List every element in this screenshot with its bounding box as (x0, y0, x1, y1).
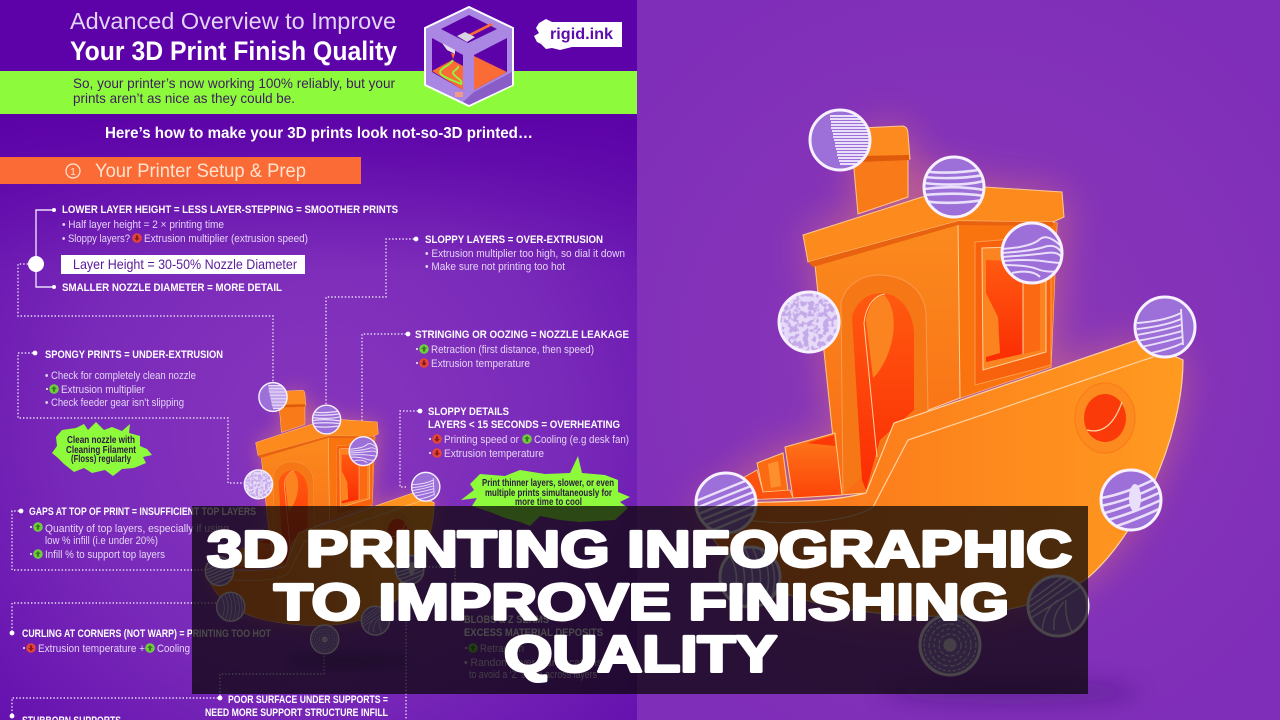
callout: clean nozzle splat: Clean nozzle with (67, 434, 135, 446)
text block: gaps at top: Quantity of top layers, especially if using (45, 523, 229, 535)
text block: blobs and z seams: EXCESS MATERIAL DEPOSITS (464, 627, 603, 639)
text block: curling: Extrusion temperature + (38, 643, 145, 655)
text block: sloppy details: Cooling (e.g desk fan) (534, 434, 629, 446)
text block: blobs and z seams: Retraction (480, 643, 524, 655)
text block: stringing: STRINGING OR OOZING = NOZZLE LEAKAGE (415, 329, 629, 341)
illustration: large benchy boat (696, 110, 1195, 704)
section bar: printer setup (0, 157, 361, 184)
header background (0, 0, 637, 112)
text block: curling: CURLING AT CORNERS (NOT WARP) = PRINTING TOO HOT (22, 628, 271, 640)
intro text (73, 75, 395, 106)
text block: sloppy layers: • Make sure not printing too hot (425, 261, 565, 273)
text block: gaps at top: low % infill (i.e under 20%) (45, 535, 158, 547)
text block: stringing: Extrusion temperature (431, 358, 530, 370)
title overlay panel (192, 506, 1088, 694)
text block: blobs and z seams (464, 614, 603, 681)
text block: layer height: • Half layer height = 2 × printing time (62, 219, 224, 231)
text block: layer height: • Sloppy layers? (62, 233, 130, 245)
text block: layer height: LOWER LAYER HEIGHT = LESS LAYER-STEPPING = SMOOTHER PRINTS (62, 204, 398, 216)
title: QUALITY (504, 626, 777, 682)
text block: sloppy details: Printing speed or (444, 434, 519, 446)
icon: 3d printer cube (425, 7, 513, 106)
text block: poor surface: NEED MORE SUPPORT STRUCTURE INFILL (205, 707, 388, 719)
text block: sloppy layers (425, 234, 625, 273)
panel: infographic background (0, 0, 637, 720)
text block: nozzle diameter: SMALLER NOZZLE DIAMETER = MORE DETAIL (62, 282, 282, 294)
text block: stringing (415, 329, 629, 370)
callout: thinner layers splat (461, 456, 630, 526)
callout: thinner layers splat: multiple prints simultaneously for (485, 487, 612, 499)
text block: sloppy details (428, 406, 629, 460)
section bar: printer setup: Your Printer Setup & Prep (95, 161, 306, 182)
connectors (10, 208, 455, 720)
text block: blobs and z seams: BLOBS & Z SEAMS (464, 614, 549, 626)
logo: rigid.ink (534, 19, 622, 50)
text block: sloppy details: SLOPPY DETAILS (428, 406, 509, 418)
text block: sloppy layers: • Extrusion multiplier too high, so dial it down (425, 248, 625, 260)
callout: clean nozzle splat (52, 422, 152, 476)
text block: gaps at top: GAPS AT TOP OF PRINT = INSUFFICIENT TOP LAYERS (29, 506, 256, 518)
text block: spongy prints (45, 349, 223, 409)
callout: clean nozzle splat: (Floss) regularly (71, 453, 131, 465)
heading: advanced overview: Your 3D Print Finish Quality (70, 36, 397, 66)
text block: stringing: Retraction (first distance, then speed) (431, 344, 594, 356)
text block: layer height: Extrusion multiplier (extrusion speed) (144, 233, 308, 245)
callout: thinner layers splat: Print thinner layers, slower, or even (482, 477, 614, 489)
callout: layer height rule: Layer Height = 30-50% Nozzle Diameter (73, 256, 297, 272)
text block: sloppy details: LAYERS < 15 SECONDS = OVERHEATING (428, 419, 620, 431)
text block: gaps at top: Infill % to support top layers (45, 549, 165, 561)
header background fade (0, 110, 637, 270)
text block: poor surface: POOR SURFACE UNDER SUPPORTS = (228, 694, 388, 706)
green intro band (0, 71, 637, 114)
text block: curling (22, 628, 271, 655)
text block: gaps at top (29, 506, 256, 561)
intro text: So, your printer’s now working 100% reliably, but your (73, 75, 395, 91)
callout: thinner layers splat: more time to cool (515, 496, 582, 508)
text block: layer height (62, 204, 398, 245)
title: TO IMPROVE FINISHING (274, 574, 1009, 630)
text block: sloppy layers: SLOPPY LAYERS = OVER-EXTRUSION (425, 234, 603, 246)
text block: blobs and z seams: • Random layer start locations (464, 657, 602, 669)
text block: spongy prints: • Check for completely clean nozzle (45, 370, 196, 382)
heading: advanced overview: Advanced Overview to Improve (70, 8, 396, 34)
intro text: prints aren’t as nice as they could be. (73, 90, 295, 106)
title (207, 520, 1072, 682)
text block: poor surface (205, 694, 388, 719)
callout: clean nozzle splat: Cleaning Filament (66, 444, 136, 456)
text block: spongy prints: Extrusion multiplier (61, 384, 145, 396)
title: 3D PRINTING INFOGRAPHIC (207, 520, 1072, 578)
panel: boat close-up background (637, 0, 1280, 720)
illustration: small benchy boat (205, 383, 440, 667)
logo: rigid.ink: rigid.ink (550, 26, 613, 43)
text block: spongy prints: SPONGY PRINTS = UNDER-EXTRUSION (45, 349, 223, 361)
text block: spongy prints: • Check feeder gear isn’t slipping (45, 397, 184, 409)
subheading: Here’s how to make your 3D prints look not-so-3D printed… (105, 125, 533, 142)
heading: advanced overview (70, 8, 397, 66)
text block: sloppy details: Extrusion temperature (444, 448, 544, 460)
text block: curling: Cooling (157, 643, 190, 655)
section bar: printer setup: 1 (70, 167, 76, 178)
text block: blobs and z seams: to avoid a ‘Z’ seam across layers (469, 669, 597, 681)
